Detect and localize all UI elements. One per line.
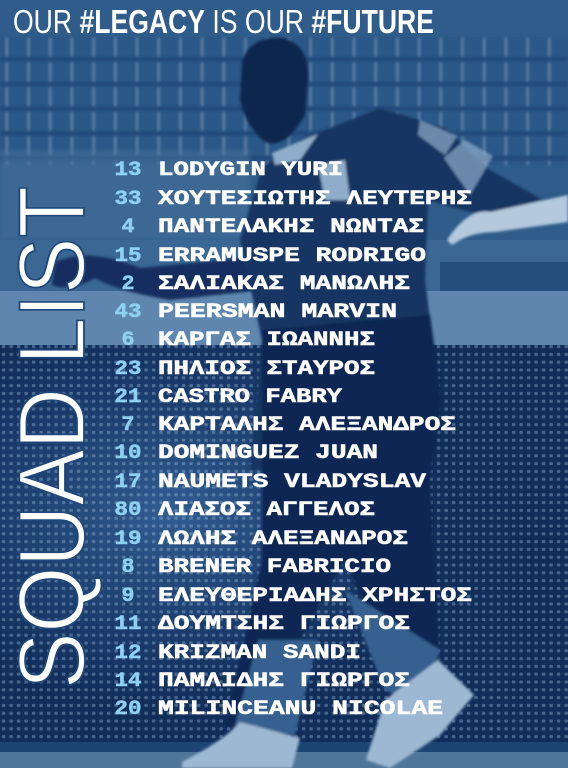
player row 14: 14 — [114, 670, 142, 693]
player row 20: MILINCEANU NICOLAE — [158, 698, 443, 721]
player: sleeve badges — [418, 120, 493, 195]
player row 6: ΚΑΡΓΑΣ ΙΩΑΝΝΗΣ — [158, 329, 375, 352]
player row 14 — [114, 670, 410, 693]
player row 43: PEERSMAN MARVIN — [158, 301, 397, 324]
player row 10: 10 — [114, 442, 142, 465]
player row 80: 80 — [114, 499, 142, 522]
player: left boot — [182, 722, 300, 768]
player row 9: 9 — [122, 585, 134, 608]
player row 2 — [122, 273, 410, 296]
player row 12 — [114, 642, 361, 665]
player row 7: 7 — [122, 414, 134, 437]
player row 7 — [122, 414, 456, 437]
player row 8 — [122, 556, 391, 579]
vertical heading: squad list: SQUAD LIST — [0, 186, 104, 689]
player row 15: ERRAMUSPE RODRIGO — [158, 245, 426, 268]
player row 6: 6 — [122, 329, 134, 352]
player row 20 — [114, 698, 443, 721]
player row 20: 20 — [114, 698, 142, 721]
player: hand at right — [447, 195, 568, 245]
player: right boot — [366, 660, 474, 768]
player: head — [240, 38, 308, 143]
player row 23: ΠΗΛΙΟΣ ΣΤΑΥΡΟΣ — [158, 358, 375, 381]
player row 7: ΚΑΡΤΑΛΗΣ ΑΛΕΞΑΝΔΡΟΣ — [158, 414, 456, 437]
title: OUR #LEGACY IS OUR #FUTURE — [13, 3, 434, 40]
player row 10 — [114, 442, 378, 465]
player row 13: 13 — [114, 159, 142, 182]
player: left arm — [52, 256, 262, 300]
player: white collar and stripes — [272, 134, 350, 200]
player: socks — [235, 590, 440, 735]
player row 80: ΛΙΑΣΟΣ ΑΓΓΕΛΟΣ — [158, 499, 375, 522]
player row 8: 8 — [122, 556, 134, 579]
player: shorts and legs — [225, 315, 442, 735]
player row 4 — [122, 216, 424, 239]
player row 17: NAUMETS VLADYSLAV — [158, 471, 427, 494]
player row 21: 21 — [114, 386, 142, 409]
player row 8: BRENER FABRICIO — [158, 556, 391, 579]
player row 11: ΔΟΥΜΤΣΗΣ ΓΙΩΡΓΟΣ — [158, 613, 410, 636]
player row 11 — [114, 613, 410, 636]
player row 80 — [114, 499, 375, 522]
player row 17 — [114, 471, 427, 494]
player row 10: DOMINGUEZ JUAN — [158, 442, 378, 465]
player row 12: KRIZMAN SANDI — [158, 642, 361, 665]
player row 21 — [114, 386, 343, 409]
squad list — [114, 159, 472, 721]
player row 12: 12 — [114, 642, 142, 665]
player row 15 — [114, 245, 426, 268]
player row 21: CASTRO FABRY — [158, 386, 343, 409]
player row 15: 15 — [114, 245, 142, 268]
player row 23 — [114, 358, 375, 381]
player row 6 — [122, 329, 375, 352]
player row 9: ΕΛΕΥΘΕΡΙΑΔΗΣ ΧΡΗΣΤΟΣ — [158, 585, 472, 608]
player row 43: 43 — [114, 301, 142, 324]
player row 19: 19 — [114, 528, 142, 551]
player row 4: 4 — [122, 216, 134, 239]
player row 13: LODYGIN YURI — [158, 159, 343, 182]
player row 33 — [114, 188, 472, 211]
player row 2: ΣΑΛΙΑΚΑΣ ΜΑΝΩΛΗΣ — [158, 273, 410, 296]
player row 11: 11 — [114, 613, 142, 636]
player row 14: ΠΑΜΛΙΔΗΣ ΓΙΩΡΓΟΣ — [158, 670, 410, 693]
player row 13 — [114, 159, 343, 182]
player row 19: ΛΩΛΗΣ ΑΛΕΞΑΝΔΡΟΣ — [158, 528, 408, 551]
player row 4: ΠΑΝΤΕΛΑΚΗΣ ΝΩΝΤΑΣ — [158, 216, 424, 239]
player: torso — [240, 108, 552, 470]
player row 19 — [114, 528, 408, 551]
player row 43 — [114, 301, 397, 324]
player row 23: 23 — [114, 358, 142, 381]
player row 17: 17 — [114, 471, 142, 494]
player row 33: 33 — [114, 188, 142, 211]
player row 33: ΧΟΥΤΕΣΙΩΤΗΣ ΛΕΥΤΕΡΗΣ — [158, 188, 472, 211]
player row 2: 2 — [122, 273, 134, 296]
